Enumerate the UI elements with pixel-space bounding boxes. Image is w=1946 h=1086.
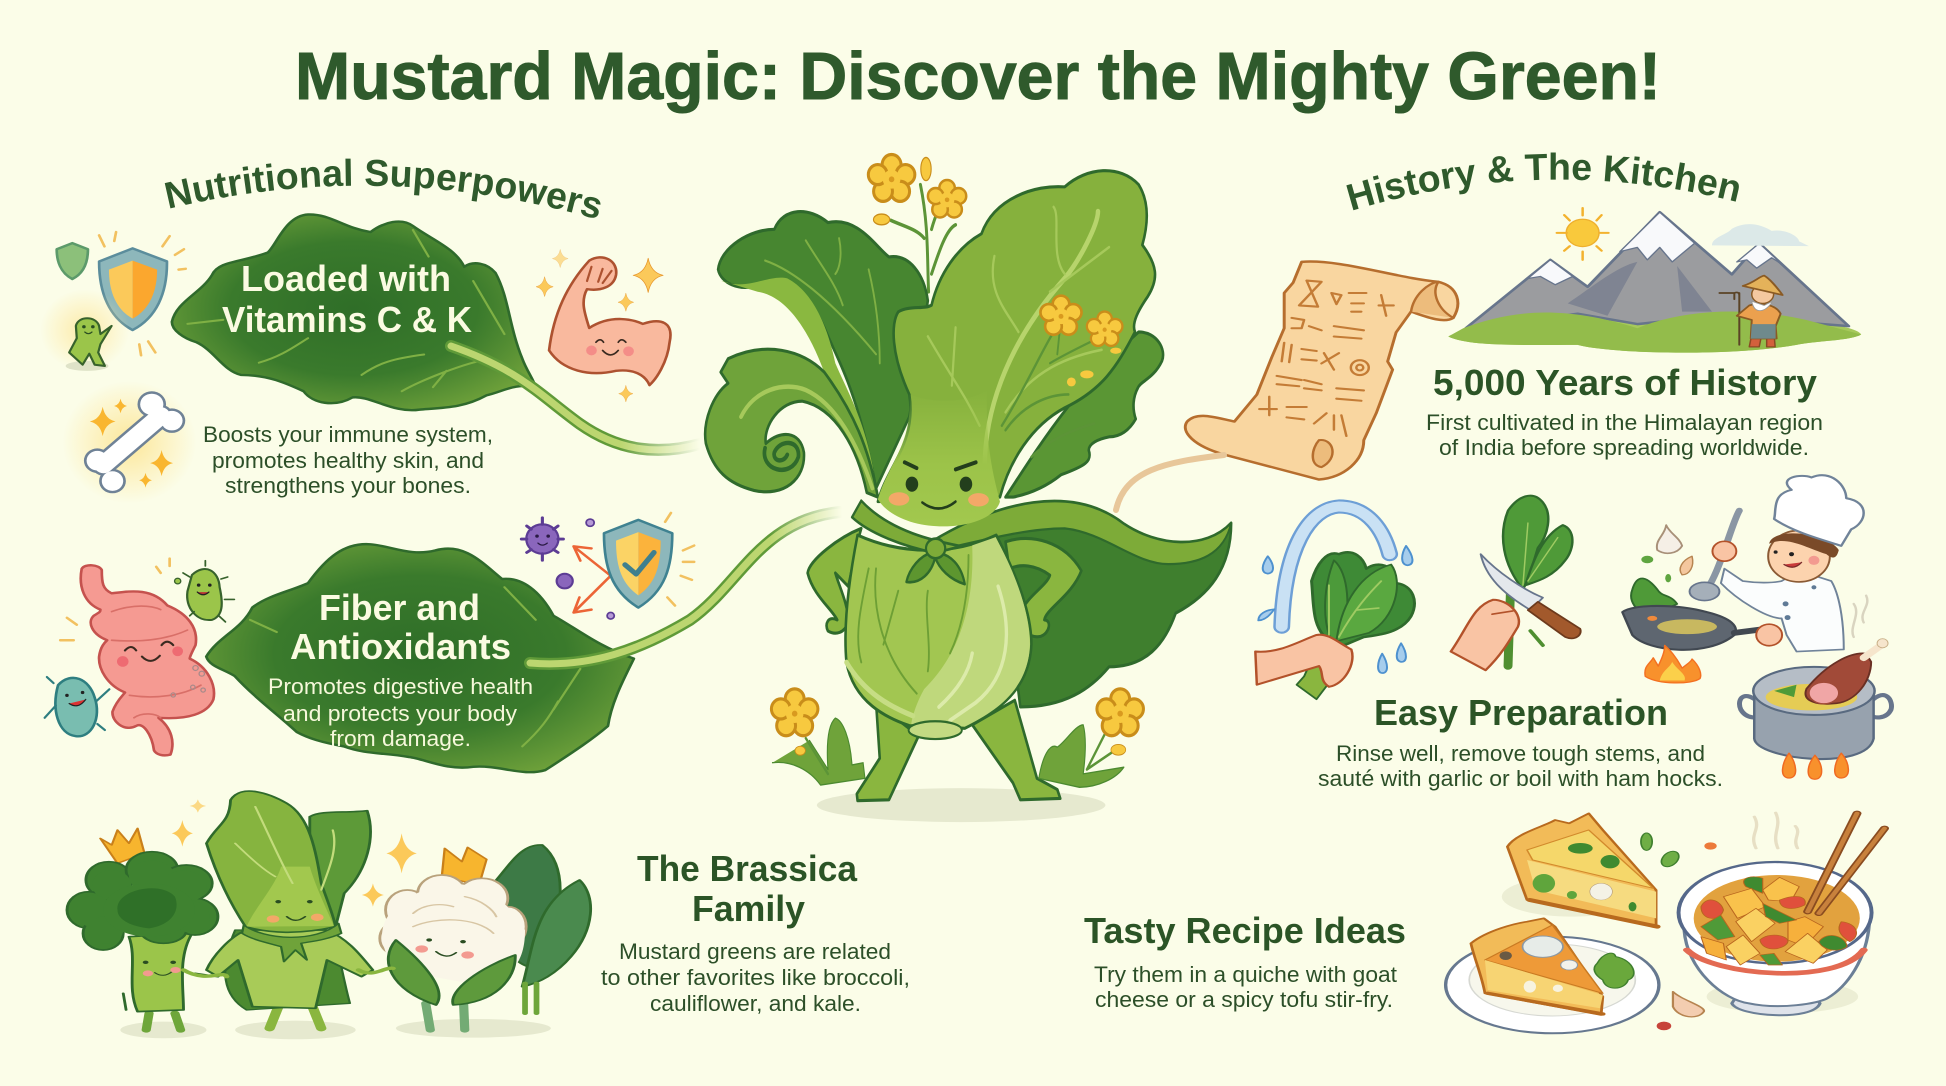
shadows <box>120 1019 551 1039</box>
icon: shield rays <box>60 513 694 640</box>
icon: garlic and bits <box>1641 525 1693 582</box>
leaf body 2 <box>268 674 533 751</box>
body fold lines <box>846 555 1006 720</box>
icon: ham hock <box>1806 639 1888 704</box>
icon: sun <box>1557 208 1608 260</box>
icon: steam <box>1853 596 1867 637</box>
text: immune body: promotes healthy skin, and <box>212 448 484 473</box>
leaf stem 2 <box>530 512 840 664</box>
block: brassica family: The Brassica <box>637 848 858 889</box>
crown on cauliflower <box>442 847 487 885</box>
leaf title 1: Vitamins C & K <box>222 299 472 340</box>
grass and flowers <box>771 689 1143 787</box>
icons: left column digestive <box>45 513 694 755</box>
text: immune body: strengthens your bones. <box>225 473 471 498</box>
illustration: recipes <box>1446 813 1885 1033</box>
block: brassica family: Mustard greens are related <box>619 939 891 964</box>
back left veins <box>765 238 880 363</box>
icon: green sprite <box>66 318 112 371</box>
icon: hand with greens <box>1255 635 1352 687</box>
garlic clove <box>1673 992 1704 1017</box>
body pale fold <box>911 537 1030 727</box>
plate <box>1446 937 1659 1033</box>
icon: sparkles <box>536 250 663 402</box>
block: easy preparation: sauté with garlic or boil with ham hocks. <box>1318 766 1723 791</box>
scarf <box>852 501 965 584</box>
leaf body 2: and protects your body <box>283 701 517 726</box>
icon: cloud <box>1712 224 1809 246</box>
icons: right column top <box>1185 208 1891 779</box>
arms <box>808 528 1081 637</box>
block: tasty recipe ideas: Try them in a quiche with goat <box>1094 962 1397 987</box>
block: easy preparation <box>1318 692 1723 791</box>
icon: greens bunch <box>1297 552 1414 699</box>
icon: check shield <box>604 520 672 608</box>
curl spiral <box>764 443 798 470</box>
body <box>845 535 1031 728</box>
icon: running water <box>1258 506 1412 673</box>
gut folds <box>112 606 201 718</box>
face stalk base <box>878 390 1000 526</box>
text: immune body: Boosts your immune system, <box>203 422 493 447</box>
block: tasty recipe ideas: Tasty Recipe Ideas <box>1084 910 1406 951</box>
garnishes <box>1641 833 1682 868</box>
block: brassica family: to other favorites like broccoli, <box>601 965 910 990</box>
scroll ribbon <box>1116 455 1224 510</box>
gut face <box>117 642 205 697</box>
block: 5,000 years <box>1426 362 1823 460</box>
cauliflower <box>380 875 526 1030</box>
icon: flexed arm <box>549 257 670 385</box>
block: easy preparation: Rinse well, remove tough stems, and <box>1336 741 1705 766</box>
block: 5,000 years: 5,000 Years of History <box>1433 362 1817 403</box>
kale <box>496 845 591 1013</box>
icon: deflect arrows <box>574 546 611 612</box>
back left leaf fold <box>721 278 876 488</box>
icon: big shield <box>99 248 167 330</box>
block: brassica family: cauliflower, and kale. <box>650 991 861 1016</box>
legs <box>857 700 1060 801</box>
quiche two <box>1471 918 1603 1015</box>
leaf title 2: Antioxidants <box>290 626 511 667</box>
icon: knife and stem <box>1451 496 1581 670</box>
panel: Loaded with Vitamins leaf <box>172 214 700 450</box>
chopsticks <box>1808 813 1885 913</box>
icon: chef coat <box>1721 569 1844 652</box>
icon: green germ <box>175 561 234 622</box>
leaf stem 1 <box>451 346 700 450</box>
leaf shape 1 <box>172 214 536 410</box>
icon: pot flames <box>1782 753 1848 779</box>
stir-fry <box>1701 877 1856 965</box>
icon: small shield <box>57 243 88 279</box>
holding hands <box>184 968 393 977</box>
back right leaf <box>1006 332 1163 497</box>
icon: chef head <box>1768 475 1864 582</box>
cape <box>932 501 1231 707</box>
heading: Nutritional Superpowers: Nutritional Superpowers <box>164 158 600 218</box>
leaf title 1 <box>222 258 472 340</box>
block: brassica family <box>601 848 910 1016</box>
block: brassica family: Family <box>692 888 805 929</box>
curl stalk <box>741 387 872 488</box>
leaf title 2: Fiber and <box>319 587 480 628</box>
cape top band <box>932 501 1231 564</box>
icon: frying pan <box>1622 578 1782 650</box>
block: tasty recipe ideas <box>1084 910 1406 1012</box>
leaf veins <box>928 207 1109 479</box>
leaf shape 2 <box>206 544 634 772</box>
icon: mountains <box>1448 212 1861 353</box>
icon: scroll <box>1185 262 1458 480</box>
icon: intestine <box>81 565 214 755</box>
block: easy preparation: Easy Preparation <box>1374 692 1668 733</box>
block: 5,000 years: First cultivated in the Himalayan region <box>1426 410 1823 435</box>
panel: Fiber leaf <box>206 512 840 772</box>
basil <box>1594 953 1634 988</box>
icon: pot <box>1740 667 1891 759</box>
heading: History & The Kitchen: History & The Kitchen <box>1346 152 1739 210</box>
leaf body 2: Promotes digestive health <box>268 674 533 699</box>
block: tasty recipe ideas: cheese or a spicy tofu stir-fry. <box>1095 987 1393 1012</box>
icon: purple virus <box>521 518 614 619</box>
bowl <box>1679 862 1872 1015</box>
steam <box>1754 813 1798 848</box>
text: immune body <box>203 422 493 498</box>
face <box>889 462 989 509</box>
curl leaf <box>705 349 878 497</box>
character: mustard hero <box>705 155 1231 822</box>
icon: old farmer <box>1719 276 1783 347</box>
scroll symbols <box>1259 281 1394 436</box>
sparkles <box>172 799 417 907</box>
icon: glow <box>40 289 129 371</box>
leaf title 2 <box>290 587 511 667</box>
leaf body 2: from damage. <box>330 726 471 751</box>
back left leaf <box>718 212 928 488</box>
flower stalk <box>868 155 966 292</box>
ground shadow <box>817 788 1105 822</box>
icons: left column top <box>40 232 670 504</box>
icon: ladle <box>1690 511 1739 601</box>
leaf title 1: Loaded with <box>241 258 451 299</box>
block: 5,000 years: of India before spreading worldwide. <box>1439 435 1809 460</box>
chef buttons <box>1783 585 1816 620</box>
front main leaf <box>878 171 1155 502</box>
illustration: brassica family <box>67 791 591 1039</box>
title: Mustard Magic: Discover the Mighty Green! <box>295 39 1661 114</box>
icon: bone <box>62 381 196 504</box>
mini mustard <box>206 791 373 1028</box>
quiche one <box>1502 813 1657 927</box>
broccoli <box>67 828 218 1030</box>
icon: blue germ <box>45 677 109 736</box>
icon: rays <box>99 232 186 355</box>
icon: pan flame <box>1645 645 1701 683</box>
leaf blossoms <box>1040 296 1122 386</box>
